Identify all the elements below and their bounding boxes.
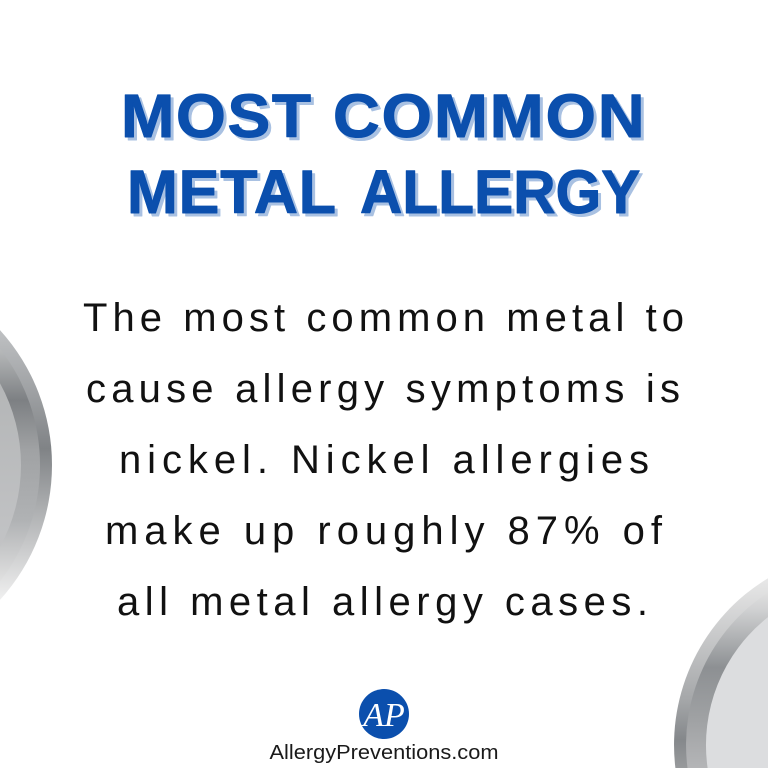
title: MOST — [124, 85, 314, 154]
title: MOST — [121, 82, 311, 151]
title: ALLERGY — [363, 161, 643, 229]
body text: The most common metal to — [83, 296, 684, 340]
logo: AP circle — [359, 689, 409, 739]
body text: nickel. Nickel allergies — [119, 438, 649, 482]
body text: cause allergy symptoms is — [86, 367, 680, 411]
title: COMMON — [333, 83, 645, 151]
title: METAL — [127, 158, 336, 226]
title: ALLERGY — [360, 158, 640, 226]
title — [121, 82, 648, 229]
logo: AP circle: AP — [361, 697, 405, 734]
icon: right metal disc — [674, 578, 768, 768]
title: COMMON — [336, 86, 648, 154]
body text: make up roughly 87% of — [105, 509, 663, 553]
icon: left metal disc — [0, 330, 52, 600]
website url: AllergyPreventions.com — [270, 742, 498, 764]
body text: all metal allergy cases. — [117, 580, 648, 624]
body text — [83, 296, 684, 624]
title: METAL — [130, 161, 339, 229]
